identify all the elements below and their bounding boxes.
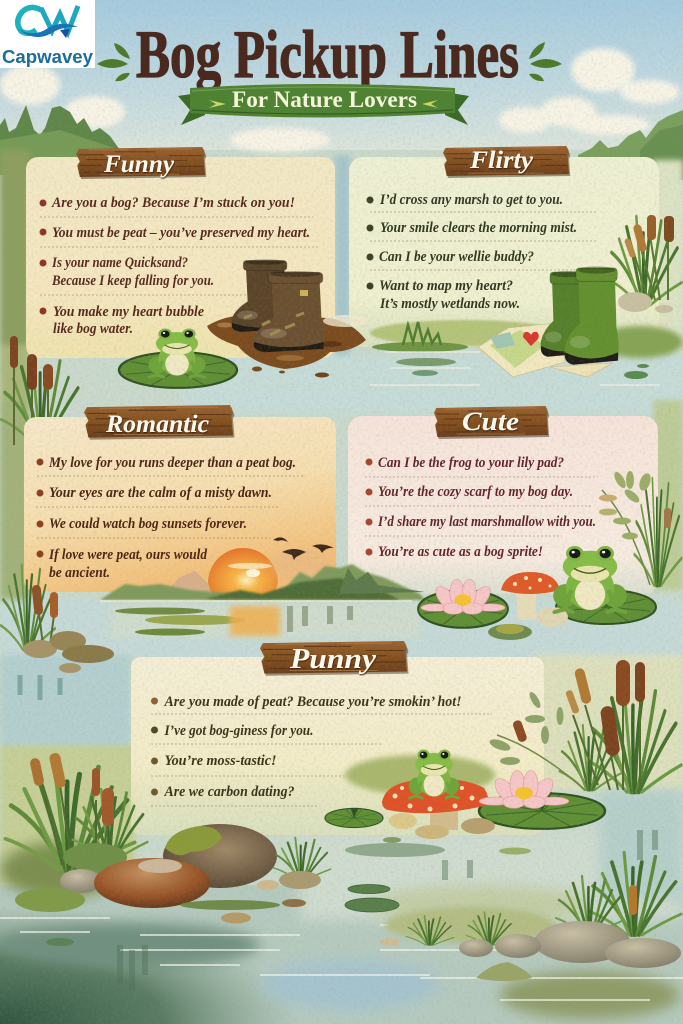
tree line right: [578, 110, 683, 180]
frog on lily pad: funny: [119, 328, 237, 388]
punny sign: Punny: [289, 644, 377, 675]
punny scene: cattails: [488, 660, 681, 792]
clouds: [0, 48, 680, 152]
panel: flirty: [349, 146, 659, 347]
sunset reflection: [110, 604, 420, 638]
flirty list: [366, 192, 597, 312]
funny list: You must be peat – you’ve preserved my heart.: [52, 225, 310, 241]
panel: funny: [26, 147, 335, 358]
punny list: Are you made of peat? Because you’re smokin’ hot!: [164, 694, 462, 710]
funny sign: Funny: [103, 151, 175, 178]
punny list: I’ve got bog-giness for you.: [164, 723, 314, 739]
leaves: right of title: [529, 42, 562, 81]
punny card: [131, 657, 544, 835]
background: sky: [0, 0, 683, 170]
leaves: left of title: [97, 43, 130, 81]
funny list: You make my heart bubble: [53, 304, 204, 320]
mud puddle: [207, 315, 367, 378]
romantic list: We could watch bog sunsets forever.: [49, 516, 247, 532]
logo: Capwavey: Capwavey: [2, 47, 93, 67]
cute list: You’re the cozy scarf to my bog day.: [378, 484, 573, 500]
flirty list: Can I be your wellie buddy?: [379, 249, 534, 265]
romantic list: My love for you runs deeper than a peat bog.: [48, 455, 296, 471]
sunset scene: [100, 537, 425, 601]
cute sign: Cute: [462, 407, 519, 436]
romantic sign: [84, 405, 234, 440]
logo: Capwavey: [0, 0, 95, 68]
title: Bog Pickup Lines: [136, 16, 519, 92]
flirty list: I’d cross any marsh to get to you.: [379, 192, 563, 208]
funny list: Is your name Quicksand?: [51, 255, 188, 271]
funny sign: [76, 147, 206, 179]
cute list: You’re as cute as a bog sprite!: [378, 544, 543, 560]
lower right grass and rocks: [380, 852, 681, 981]
panel: punny: [131, 641, 544, 835]
cute scene: lily pads, mushroom, frog: [340, 470, 682, 640]
romantic list: be ancient.: [49, 565, 110, 581]
mountain: [165, 571, 220, 592]
funny card: [26, 157, 335, 358]
mushroom: [501, 572, 560, 620]
muddy boots: [232, 259, 324, 352]
punny scene: frog on mushroom and lily pad: [325, 750, 605, 857]
panel: romantic: [24, 405, 336, 592]
cute list: [365, 455, 598, 560]
heart: [523, 332, 539, 346]
flirty list: It’s mostly wetlands now.: [379, 296, 520, 312]
punny sign: [260, 641, 408, 676]
marsh grass under flirty: [370, 320, 683, 385]
rocks: [618, 292, 652, 312]
punny list: Are we carbon dating?: [164, 784, 294, 800]
cute card: [348, 416, 658, 594]
funny list: [40, 195, 318, 337]
cattails: flirty: [608, 215, 682, 313]
flirty list: Want to map my heart?: [379, 278, 513, 294]
romantic list: [36, 455, 303, 581]
subtitle ribbon: [178, 84, 469, 125]
panel: cute: [348, 406, 658, 594]
romantic card: [24, 417, 336, 592]
funny list: Because I keep falling for you.: [51, 273, 214, 289]
flirty list: Your smile clears the morning mist.: [380, 220, 577, 236]
birds: [273, 537, 334, 560]
punny list: [151, 694, 492, 806]
flirty sign: Flirty: [469, 147, 534, 174]
sun: [208, 548, 278, 600]
water reeds: [340, 568, 425, 594]
romantic list: Your eyes are the calm of a misty dawn.: [49, 485, 272, 501]
cattails: far left: [1, 336, 83, 445]
lower left rocks: [15, 824, 331, 946]
romantic sign: Romantic: [105, 411, 209, 438]
romantic list: If love were peat, ours would: [48, 547, 207, 563]
cute list: Can I be the frog to your lily pad?: [378, 455, 564, 471]
funny list: like bog water.: [53, 321, 133, 337]
flirty card: [349, 157, 659, 347]
lily pads in pond: [345, 884, 399, 912]
cattails and rocks: lower romantic: [1, 565, 114, 700]
punny list: You’re moss-tastic!: [164, 753, 276, 769]
subtitle text: For Nature Lovers: [232, 87, 417, 112]
cute list: I’d share my last marshmallow with you.: [377, 514, 596, 530]
boots: [541, 271, 586, 357]
horizon reeds: [100, 564, 425, 600]
flirty sign: [443, 146, 570, 178]
map: [478, 323, 565, 377]
lower left cattails: [0, 752, 147, 898]
funny list: Are you a bog? Because I’m stuck on you!: [51, 195, 295, 211]
green wellies and map: [478, 266, 619, 377]
cute sign: [434, 406, 549, 439]
scenery washes: [0, 150, 683, 885]
sprig plant: [599, 470, 682, 585]
tree line left: [0, 105, 120, 175]
lower pond water: [0, 790, 683, 1024]
